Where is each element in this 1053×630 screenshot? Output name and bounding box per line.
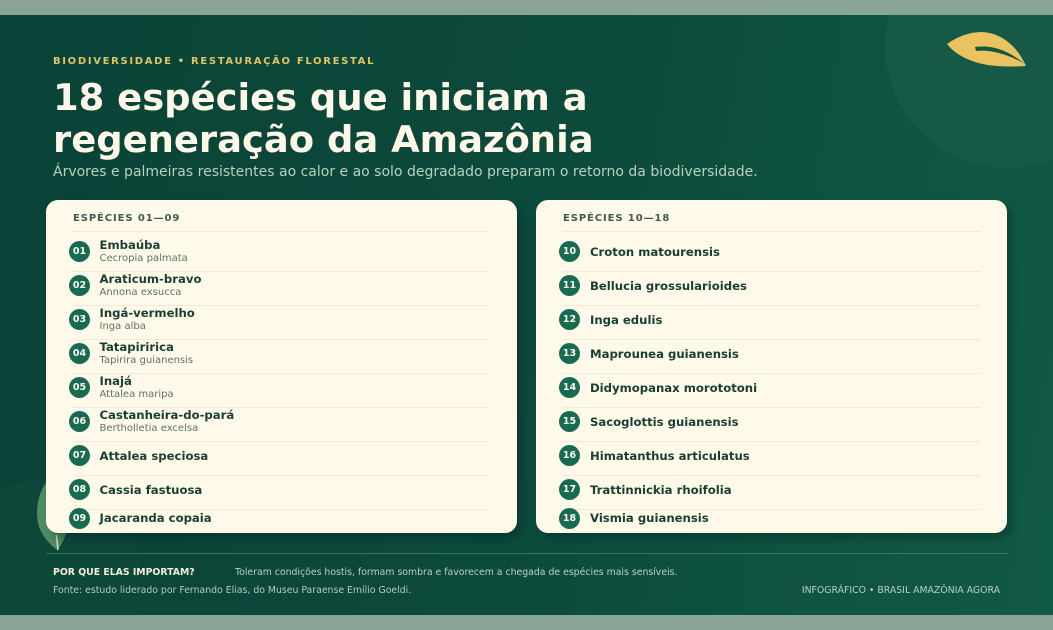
species 12: Inga edulis: [590, 312, 662, 326]
species 14: Didymopanax morototoni: [590, 380, 757, 394]
species 13: 13: [563, 348, 576, 359]
species 05: [69, 374, 174, 400]
species 06: 06: [73, 416, 86, 427]
icon: gold leaf: [947, 32, 1026, 66]
species 16: Himatanthus articulatus: [590, 448, 750, 462]
species 17: [559, 479, 732, 500]
species 02: 02: [73, 280, 86, 291]
species 08: 08: [73, 484, 86, 495]
species 01: Embaúba: [100, 238, 160, 252]
species 08: Cassia fastuosa: [100, 482, 202, 496]
title: [53, 76, 594, 161]
species 05: Inajá: [100, 374, 132, 388]
footer: why they matter text: Toleram condições hostis, formam sombra e favorecem a chegada de espécies mais sensíveis.: [235, 566, 678, 578]
species 04: [69, 340, 193, 366]
species 09: Jacaranda copaia: [100, 510, 212, 524]
species 16: [559, 445, 750, 466]
species 14: 14: [563, 382, 576, 393]
icon: bottom leaf: [37, 482, 66, 550]
panel heading: ESPÉCIES 10—18: [563, 212, 670, 224]
species 10: [559, 241, 720, 262]
species 07: [69, 445, 208, 466]
species 06: Bertholletia excelsa: [100, 422, 198, 434]
title: regeneração da Amazônia: [53, 118, 594, 161]
species 15: Sacoglottis guianensis: [590, 414, 739, 428]
title: 18 espécies que iniciam a: [53, 76, 588, 119]
species 01: [69, 238, 188, 264]
decorative circle top right: [885, 15, 1053, 168]
species 18: Vismia guianensis: [590, 510, 709, 524]
species 08: [69, 479, 202, 500]
decorative circle bottom left: [0, 481, 144, 615]
species 16: 16: [563, 450, 576, 461]
species 12: [559, 309, 662, 330]
species 03: [69, 306, 195, 332]
species 01: Cecropia palmata: [100, 252, 188, 264]
species 07: Attalea speciosa: [100, 448, 208, 462]
species 06: [69, 408, 234, 434]
panel: espécies 10-18: [536, 200, 1007, 533]
species 18: [559, 508, 709, 529]
species 13: Maprounea guianensis: [590, 346, 739, 360]
species 10: 10: [563, 246, 576, 257]
species 03: Ingá-vermelho: [100, 306, 195, 320]
species 05: 05: [73, 382, 86, 393]
species 14: [559, 377, 757, 398]
species 13: [559, 343, 739, 364]
footer: why they matter label: POR QUE ELAS IMPORTAM?: [53, 566, 195, 578]
species 15: [559, 411, 739, 432]
species 04: Tatapiririca: [100, 340, 174, 354]
species 02: [69, 272, 201, 298]
species 09: [69, 508, 212, 529]
species 06: Castanheira-do-pará: [100, 408, 234, 422]
species 09: 09: [73, 512, 86, 524]
species 12: 12: [563, 314, 576, 325]
species 11: [559, 275, 747, 296]
species 17: 17: [563, 484, 576, 495]
species 17: Trattinnickia rhoifolia: [590, 482, 732, 496]
species 03: Inga alba: [100, 320, 146, 332]
eyebrow: BIODIVERSIDADE • RESTAURAÇÃO FLORESTAL: [53, 56, 375, 67]
species 02: Annona exsucca: [100, 286, 181, 298]
footer: source: Fonte: estudo liderado por Fernando Elias, do Museu Paraense Emílio Goeldi.: [53, 585, 411, 596]
species 04: 04: [73, 348, 86, 359]
species 11: Bellucia grossularioides: [590, 278, 747, 292]
species 03: 03: [73, 314, 86, 325]
panel heading: ESPÉCIES 01—09: [73, 212, 180, 224]
species 05: Attalea maripa: [100, 388, 174, 400]
subtitle: Árvores e palmeiras resistentes ao calor e ao solo degradado preparam o retorno da biodiversidade.: [53, 164, 758, 180]
footer: credit: INFOGRÁFICO • BRASIL AMAZÔNIA AGORA: [802, 585, 1000, 596]
species 01: 01: [73, 246, 86, 257]
species 02: Araticum-bravo: [100, 272, 201, 286]
species 07: 07: [73, 450, 86, 461]
panel: espécies 01-09: [46, 200, 517, 533]
species 11: 11: [563, 280, 576, 291]
species 15: 15: [563, 416, 576, 427]
species 04: Tapirira guianensis: [100, 354, 193, 366]
species 10: Croton matourensis: [590, 244, 720, 258]
species 18: 18: [563, 512, 576, 524]
